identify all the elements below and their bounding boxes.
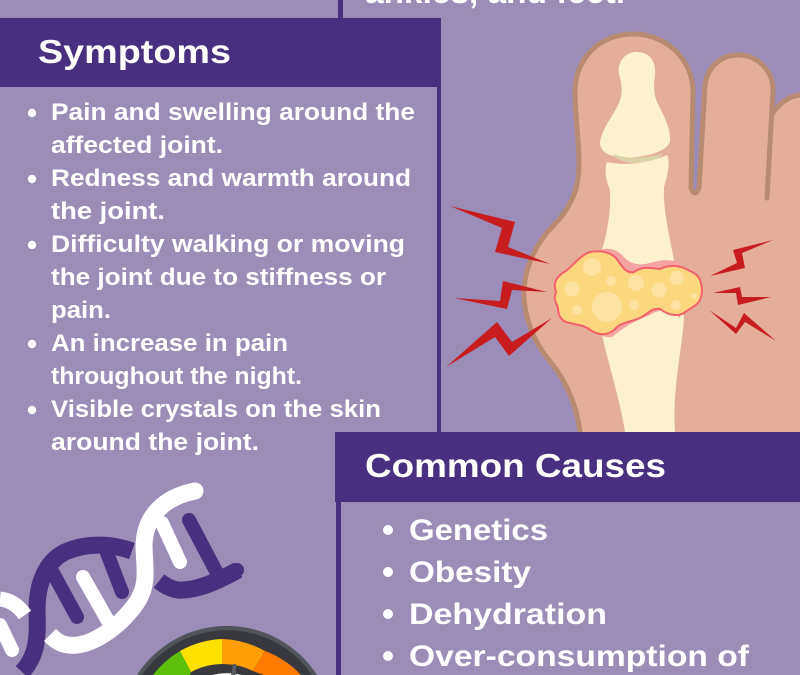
crystal bubbles <box>564 258 697 322</box>
symptoms list: Pain and swelling around the <box>51 99 415 126</box>
symptoms list: throughout the night. <box>51 363 302 390</box>
symptoms list: affected joint. <box>51 132 223 159</box>
symptoms list: Difficulty walking or moving <box>51 231 405 258</box>
heading: Symptoms: Symptoms <box>38 33 231 70</box>
causes list: Dehydration <box>409 598 607 631</box>
symptoms list: Visible crystals on the skin <box>51 396 381 423</box>
symptoms list: around the joint. <box>51 429 259 456</box>
symptoms list: pain. <box>51 297 111 324</box>
causes list: Genetics <box>409 514 548 547</box>
pain bolts right <box>709 240 776 341</box>
panel: symptoms <box>0 18 441 456</box>
icon: DNA helix <box>0 482 244 672</box>
symptoms list: the joint due to stiffness or <box>51 264 386 291</box>
toe outline <box>524 34 800 432</box>
symptoms list <box>28 99 415 456</box>
foot skin <box>524 34 800 432</box>
symptoms list: An increase in pain <box>51 330 288 357</box>
symptoms panel right border <box>437 18 441 432</box>
causes list: Obesity <box>409 556 531 589</box>
joint shadow <box>612 153 664 163</box>
long bone <box>600 155 684 432</box>
illustration: gouty big toe <box>446 34 800 432</box>
heading: Symptoms <box>0 18 441 87</box>
top text fragment <box>338 0 625 18</box>
panel: common causes <box>335 432 800 675</box>
heading: Common Causes <box>335 432 800 502</box>
symptoms list: the joint. <box>51 198 165 225</box>
pain bolts left <box>446 206 552 367</box>
toe bone tip <box>600 52 670 158</box>
causes panel left border <box>336 502 341 675</box>
icon: gauge <box>137 626 317 675</box>
heading: Common Causes: Common Causes <box>365 447 666 484</box>
pink halo <box>595 249 684 337</box>
symptoms list: Redness and warmth around <box>51 165 411 192</box>
causes list <box>383 514 750 673</box>
crystal mass <box>555 251 702 334</box>
causes list: Over-consumption of <box>409 640 750 673</box>
